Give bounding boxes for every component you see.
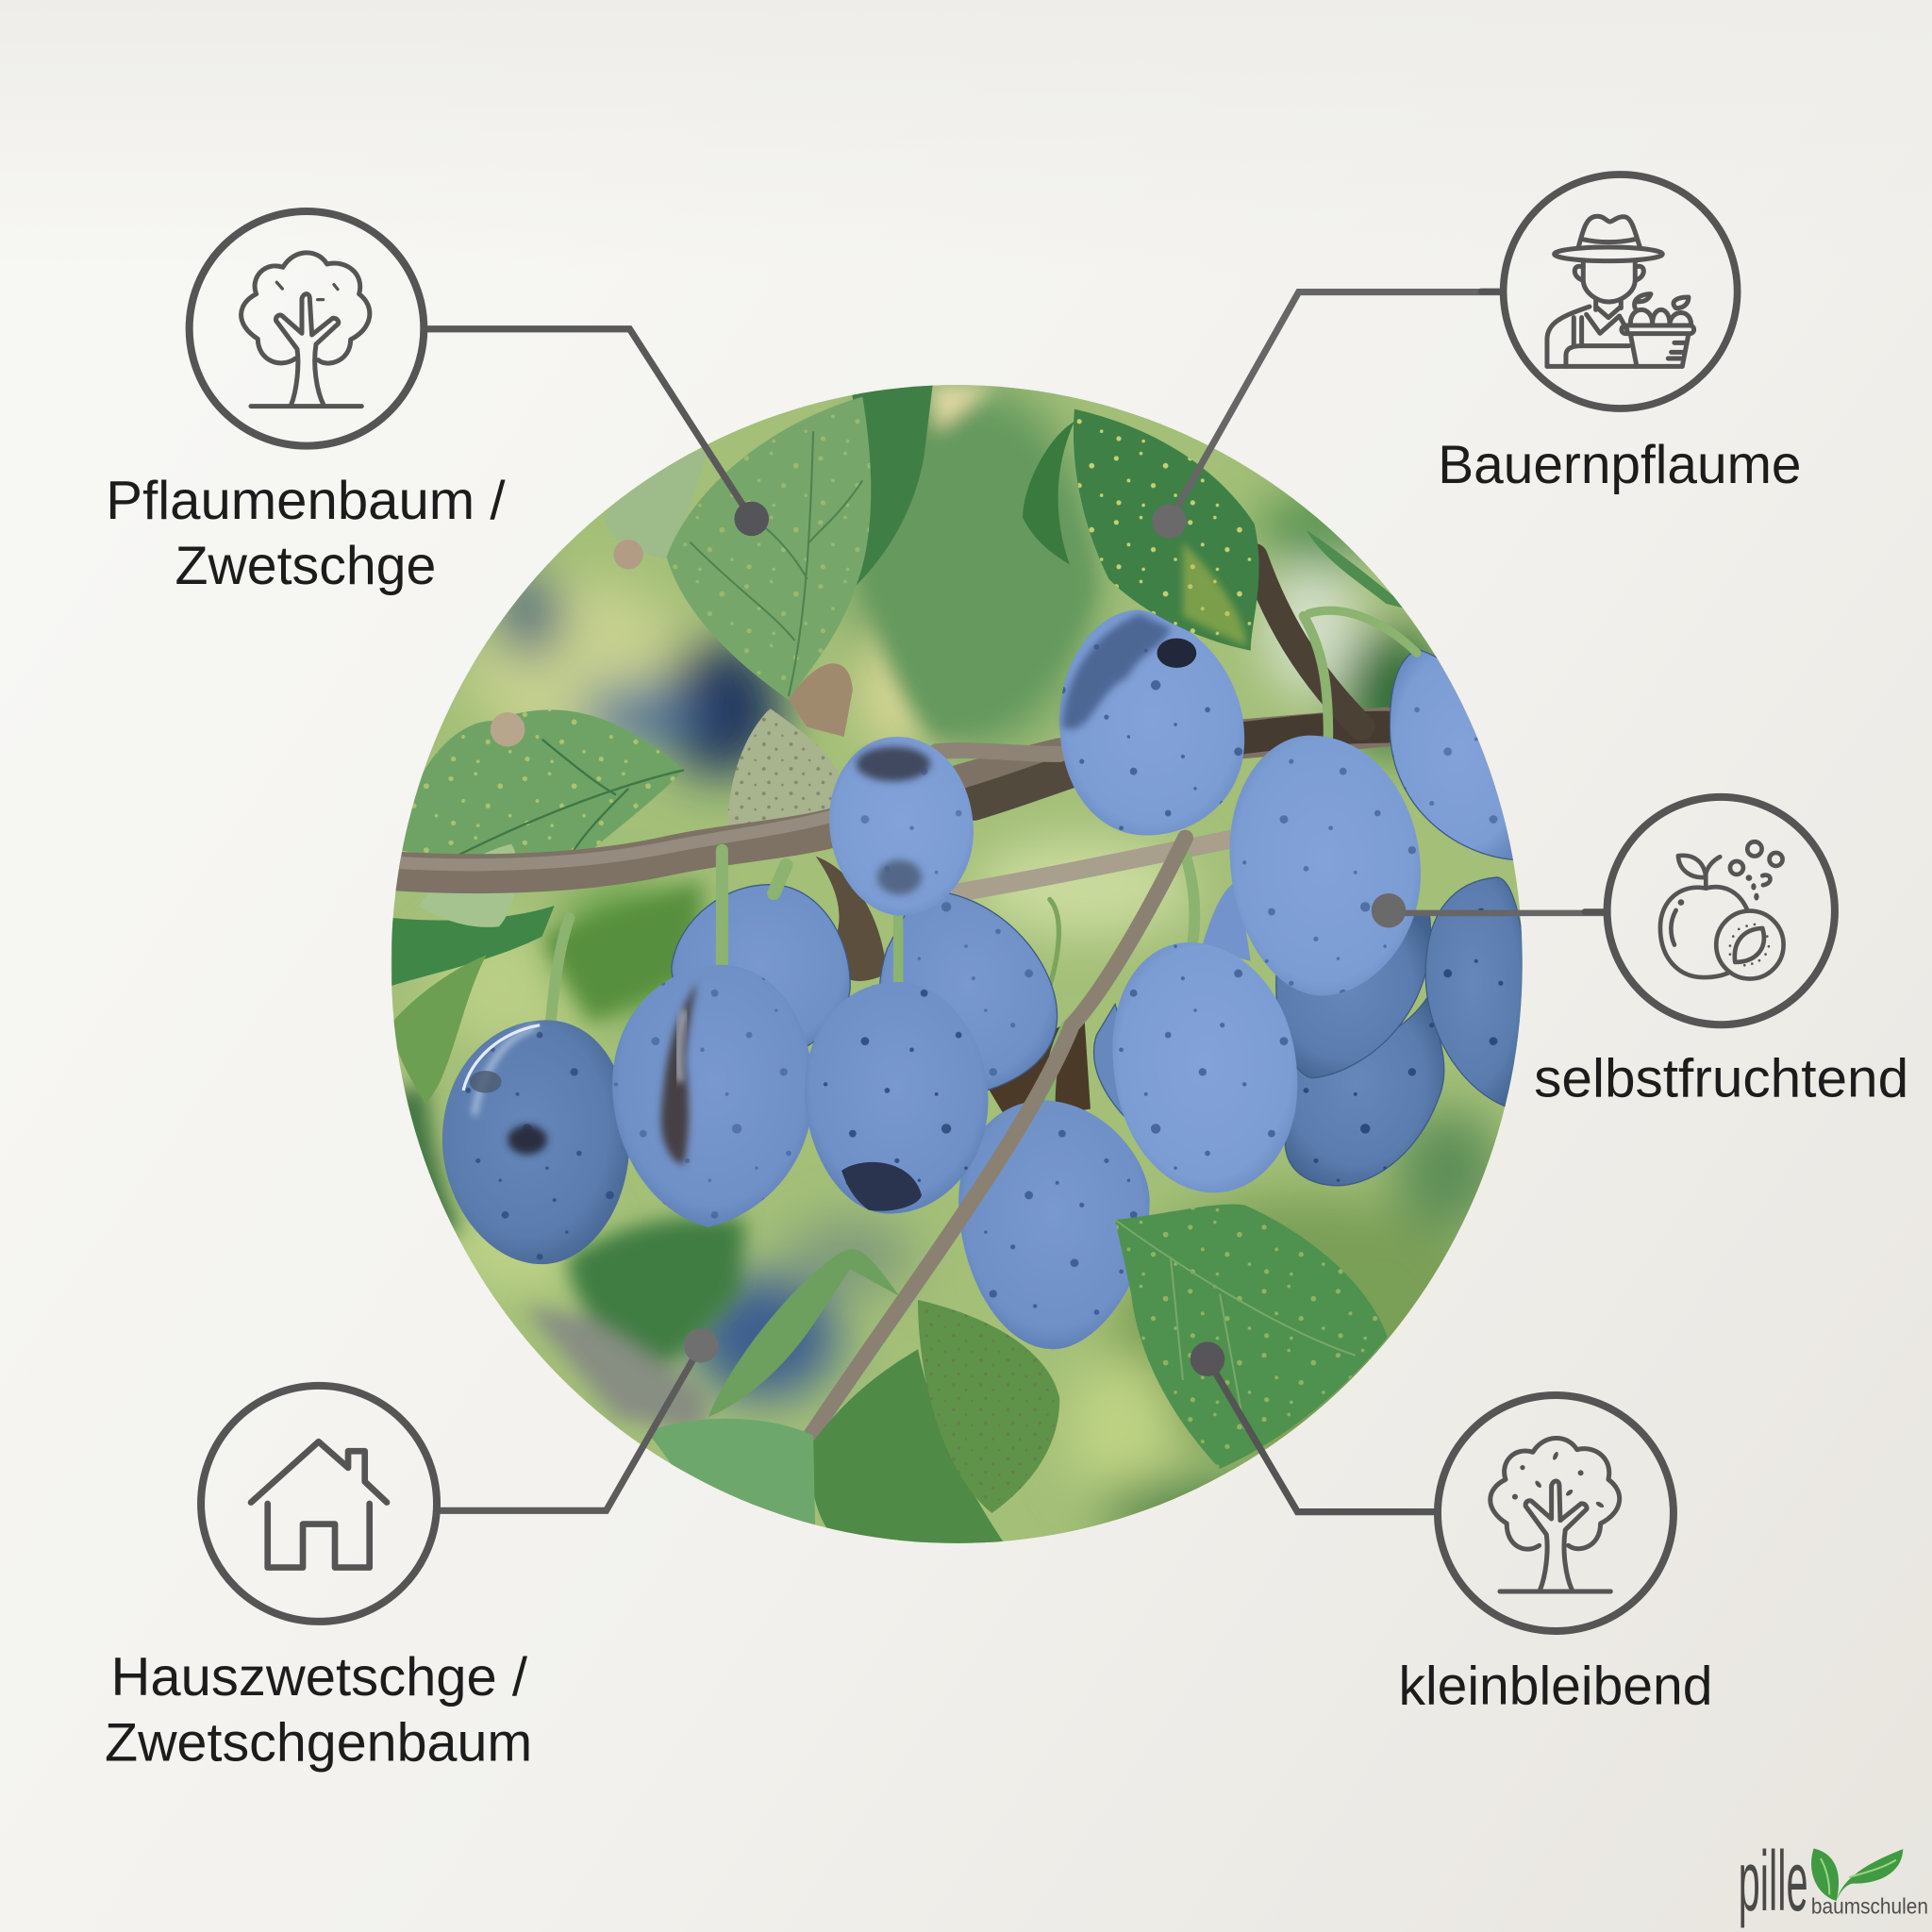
label: Pflaumenbaum / Zwetschge <box>106 471 506 596</box>
leaf: left <box>400 709 684 862</box>
plum: lower centre <box>1112 942 1297 1192</box>
thin background branch <box>961 838 1239 892</box>
leaf: top right <box>1023 409 1411 651</box>
leaf: dried speckled <box>727 708 840 825</box>
photo background: blurred foliage <box>370 370 1553 1565</box>
leaf: lower left <box>391 844 555 1103</box>
icon: farmer <box>1481 175 1738 408</box>
back plums <box>672 649 1531 1186</box>
photo: plums on a branch <box>370 370 1553 1565</box>
connector: Bauernpflaume <box>1152 292 1501 539</box>
plum: large centre right <box>1230 736 1421 995</box>
label: Hauszwetschge / Zwetschgenbaum: Zwetschgenbaum <box>105 1712 532 1773</box>
label: Bauernpflaume: Bauernpflaume <box>1438 435 1802 495</box>
label: kleinbleibend: kleinbleibend <box>1398 1656 1713 1716</box>
branches <box>394 557 1386 986</box>
plum: streak <box>612 965 813 1227</box>
plum: black patch <box>805 982 989 1214</box>
leaf: bottom centre <box>647 1249 1059 1553</box>
connector: Pflaumenbaum <box>425 329 769 536</box>
icon: tree <box>190 211 424 446</box>
plum: top <box>1059 610 1244 836</box>
icon: house <box>201 1386 437 1622</box>
leaf: bottom right <box>1115 1205 1388 1469</box>
stems <box>545 606 1422 1102</box>
connector: Hauszwetschge <box>440 1328 718 1510</box>
connector: selbstfruchtend <box>1372 893 1606 928</box>
label: Pflaumenbaum / Zwetschge: Zwetschge <box>175 536 436 596</box>
label: Hauszwetschge / Zwetschgenbaum: Hauszwetschge / <box>111 1647 527 1707</box>
plum: bottom <box>958 1100 1150 1349</box>
plum: far left <box>442 1020 629 1264</box>
leaf: top left <box>604 385 933 737</box>
label: Hauszwetschge / Zwetschgenbaum <box>105 1647 532 1773</box>
icon: small tree <box>1415 1395 1674 1631</box>
label: Pflaumenbaum / Zwetschge: Pflaumenbaum / <box>106 471 506 531</box>
brown dried leaves <box>816 857 1091 1115</box>
plum: small top <box>829 737 974 916</box>
diagonal twig <box>810 838 1185 1436</box>
connector: kleinbleibend <box>1191 1341 1436 1512</box>
icon: fruit <box>1585 797 1835 1024</box>
logo: pille baumschulen: pille <box>1739 1835 1808 1929</box>
label: selbstfruchtend: selbstfruchtend <box>1534 1048 1908 1108</box>
